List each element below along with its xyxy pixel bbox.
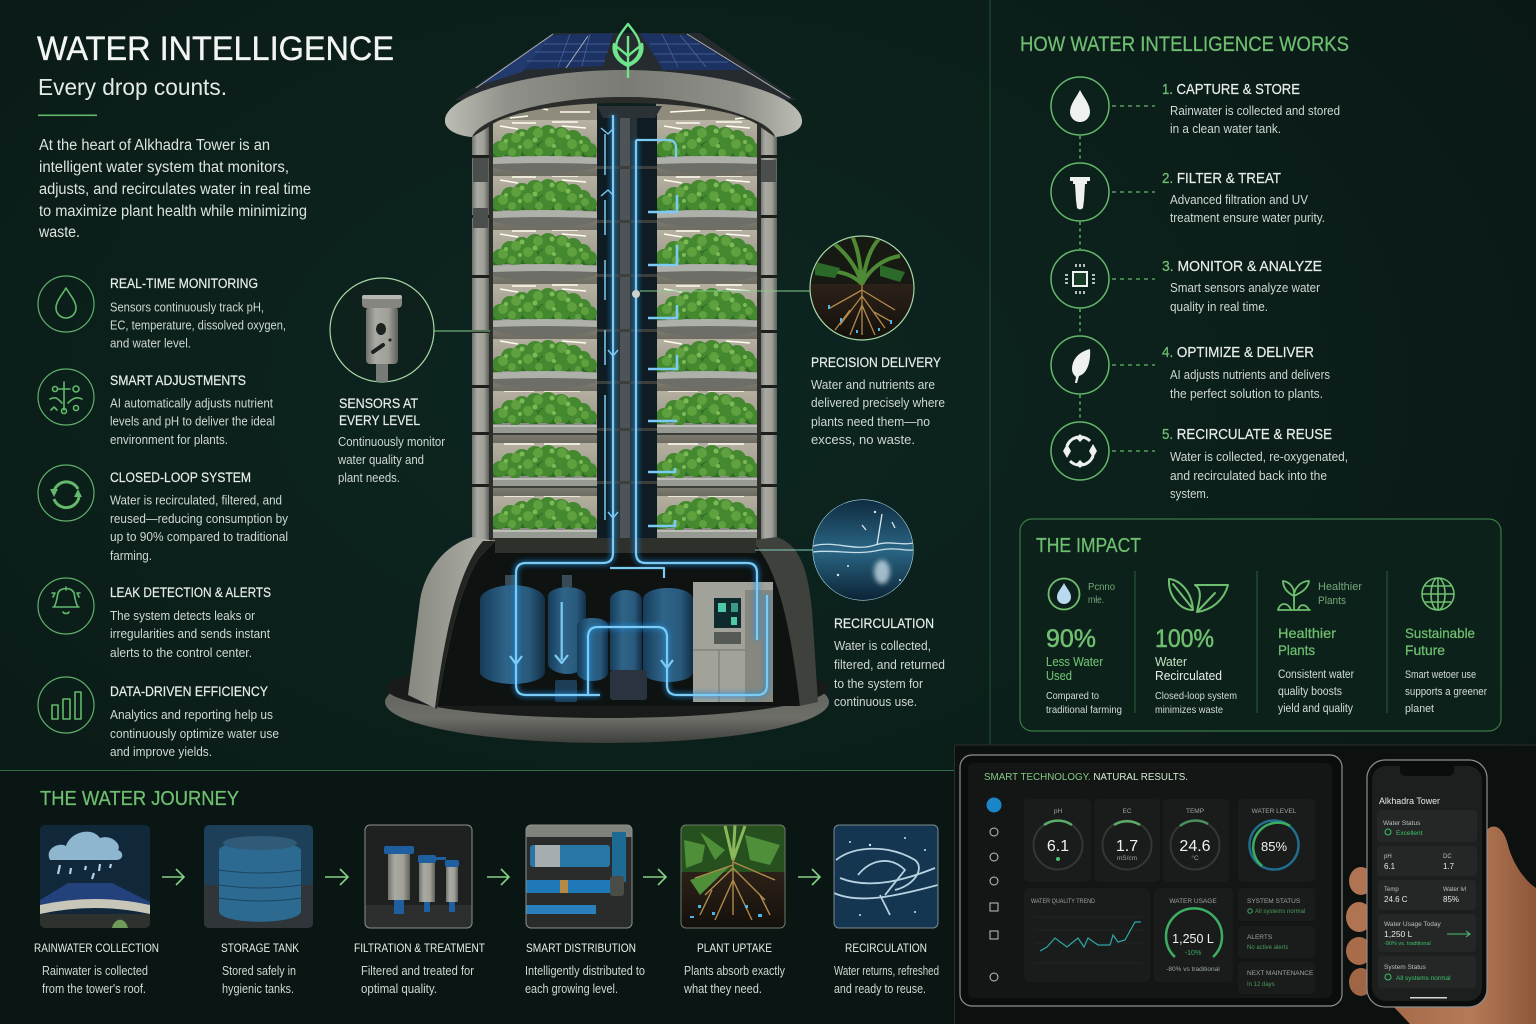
right growing bay <box>656 100 761 548</box>
step 2 filter and treat: 2. FILTER & TREAT <box>1162 171 1281 187</box>
journey 5 plant uptake: what they need. <box>683 982 762 996</box>
impact: healthier plants: Plants <box>1278 642 1315 658</box>
feature: real-time monitoring: REAL-TIME MONITORING <box>110 276 258 291</box>
impact: water recirculated: Recirculated <box>1155 669 1222 683</box>
callout: precision delivery: Water and nutrients are <box>811 378 935 392</box>
hand holding phone <box>1346 826 1536 1024</box>
intro paragraph <box>38 137 311 241</box>
journey 3 filtration and treatment: optimal quality. <box>361 982 437 996</box>
step 5 recirculate and reuse: Water is collected, re-oxygenated, <box>1170 450 1348 464</box>
step 3 monitor and analyze <box>1051 250 1322 314</box>
card alerts: ALERTS <box>1247 934 1273 941</box>
impact: healthier plants <box>1278 581 1362 715</box>
intro paragraph: At the heart of Alkhadra Tower is an <box>39 137 270 154</box>
water pipes <box>510 115 767 695</box>
step 5 recirculate and reuse: system. <box>1170 487 1209 501</box>
phone system status: All systems normal <box>1396 975 1451 982</box>
dashboard sidebar <box>986 798 1002 981</box>
step 4 optimize and deliver: 4. OPTIMIZE & DELIVER <box>1162 345 1314 361</box>
feature: real-time monitoring <box>38 276 286 350</box>
phone water usage: -90% vs. traditional <box>1384 941 1431 947</box>
step 1 capture and store: in a clean water tank. <box>1170 122 1281 136</box>
card water usage: WATER USAGE <box>1169 898 1217 905</box>
left growing bay <box>492 100 597 548</box>
step 5 recirculate and reuse: 5. RECIRCULATE & REUSE <box>1162 427 1332 443</box>
phone water status: Excellent <box>1396 830 1423 837</box>
journey 5 plant uptake: PLANT UPTAKE <box>697 943 772 955</box>
callout: sensors at every level: EVERY LEVEL <box>339 412 420 428</box>
impact: water recirculated: 100% <box>1155 625 1214 653</box>
step 1 capture and store <box>1051 77 1340 136</box>
card next maintenance: NEXT MAINTENANCE <box>1247 970 1314 977</box>
roof rim <box>445 70 802 137</box>
impact: healthier plants: Plants <box>1318 595 1346 607</box>
impact: water recirculated <box>1155 579 1237 716</box>
feature: leak detection: LEAK DETECTION & ALERTS <box>110 585 271 600</box>
feature: leak detection <box>38 578 271 660</box>
phone metrics: Water lvl <box>1443 887 1466 893</box>
feature: closed-loop system: farming. <box>110 549 152 563</box>
intro paragraph: waste. <box>38 224 80 241</box>
step 2 filter and treat: treatment ensure water purity. <box>1170 211 1325 225</box>
feature: data-driven efficiency: continuously optimize water use <box>110 727 279 741</box>
impact: less water: Less Water <box>1046 655 1103 669</box>
central core <box>597 106 662 540</box>
feature: closed-loop system: CLOSED-LOOP SYSTEM <box>110 470 251 485</box>
impact: water recirculated: Water <box>1155 655 1187 669</box>
step 3 monitor and analyze: Smart sensors analyze water <box>1170 281 1320 295</box>
impact: less water: Compared to <box>1046 690 1099 702</box>
impact: less water <box>1046 578 1122 716</box>
card water level: 85% <box>1261 839 1287 854</box>
journey 5 plant uptake: Plants absorb exactly <box>684 964 786 978</box>
phone metrics: Temp <box>1384 887 1399 893</box>
tower body <box>472 125 777 540</box>
callout: sensors at every level: SENSORS AT <box>339 395 418 411</box>
card pH: pH <box>1054 808 1062 815</box>
card alerts <box>1238 926 1315 958</box>
impact: healthier plants: quality boosts <box>1278 686 1342 698</box>
feature: real-time monitoring: EC, temperature, dissolved oxygen, <box>110 318 286 332</box>
impact: sustainable future: planet <box>1405 703 1434 715</box>
tower illustration <box>385 24 829 743</box>
step 4 optimize and deliver <box>1051 336 1330 401</box>
callout: sensors at every level <box>330 278 490 485</box>
feature: leak detection: The system detects leaks or <box>110 609 255 623</box>
callout: sensors at every level: water quality and <box>337 453 424 467</box>
phone metrics: 1.7 <box>1443 862 1455 871</box>
card TEMP: 24.6 <box>1179 838 1211 855</box>
card EC: mS/cm <box>1117 855 1137 862</box>
journey 3 filtration and treatment: FILTRATION & TREATMENT <box>354 943 485 955</box>
phone water status: Water Status <box>1383 820 1421 827</box>
panel: the impact <box>1020 519 1501 731</box>
water journey <box>34 825 939 996</box>
phone water usage: Water Usage Today <box>1384 921 1441 928</box>
card next maintenance: In 12 days <box>1247 982 1275 988</box>
card water usage: 1,250 L <box>1172 932 1214 946</box>
feature: data-driven efficiency: DATA-DRIVEN EFFICIENCY <box>110 684 268 699</box>
journey 4 smart distribution: Intelligently distributed to <box>525 964 645 978</box>
card water level: WATER LEVEL <box>1252 808 1297 815</box>
callout: sensors at every level: Continuously monitor <box>338 435 445 449</box>
feature: smart adjustments: levels and pH to deliver the ideal <box>110 414 275 428</box>
journey 1 rainwater collection <box>34 825 184 996</box>
callout: recirculation: to the system for <box>834 677 923 691</box>
process steps <box>1051 77 1348 501</box>
card water usage <box>1154 888 1233 982</box>
callout: precision delivery: PRECISION DELIVERY <box>811 355 941 370</box>
phone metrics: pH <box>1384 854 1392 860</box>
journey 2 storage tank: Stored safely in <box>222 964 296 978</box>
card pH: 6.1 <box>1047 838 1069 855</box>
journey 3 filtration and treatment: Filtered and treated for <box>361 964 474 978</box>
journey 2 storage tank: hygienic tanks. <box>222 982 294 996</box>
impact: less water: traditional farming <box>1046 704 1122 716</box>
step 1 capture and store: Rainwater is collected and stored <box>1170 104 1340 118</box>
callout: precision delivery: delivered precisely where <box>811 396 945 410</box>
journey 1 rainwater collection: from the tower's roof. <box>42 982 146 996</box>
feature: real-time monitoring: Sensors continuously track pH, <box>110 300 264 314</box>
journey 6 recirculation: RECIRCULATION <box>845 943 927 955</box>
journey 4 smart distribution: each growing level. <box>525 982 618 996</box>
feature: smart adjustments: AI automatically adjusts nutrient <box>110 396 273 410</box>
water tanks <box>480 575 693 702</box>
journey 6 recirculation: Water returns, refreshed <box>834 964 939 978</box>
callout: recirculation <box>755 500 945 709</box>
feature: leak detection: alerts to the control center. <box>110 646 252 660</box>
feature: smart adjustments: SMART ADJUSTMENTS <box>110 373 246 388</box>
feature: data-driven efficiency: Analytics and reporting help us <box>110 708 273 722</box>
feature: leak detection: irregularities and sends instant <box>110 627 270 641</box>
phone water usage <box>1378 914 1476 952</box>
step 5 recirculate and reuse <box>1051 422 1348 501</box>
impact heading: THE IMPACT <box>1036 535 1141 557</box>
impact: healthier plants: Healthier <box>1318 581 1362 593</box>
step 2 filter and treat: Advanced filtration and UV <box>1170 193 1309 207</box>
card alerts: No active alerts <box>1247 945 1288 951</box>
feature: smart adjustments <box>38 369 275 447</box>
impact: healthier plants: yield and quality <box>1278 703 1353 715</box>
callout: recirculation: continuous use. <box>834 695 917 709</box>
card TEMP: TEMP <box>1186 808 1204 815</box>
impact: less water: Used <box>1046 669 1072 683</box>
impact: less water: rnłe. <box>1088 595 1104 606</box>
step 3 monitor and analyze: quality in real time. <box>1170 300 1268 314</box>
impact: healthier plants: Healthier <box>1278 625 1336 641</box>
impact: less water: Pcnno <box>1088 582 1115 593</box>
phone water status <box>1377 810 1477 842</box>
phone metrics: 85% <box>1443 895 1459 904</box>
intro paragraph: intelligent water system that monitors, <box>39 159 289 176</box>
callout: precision delivery: plants need them—no <box>811 415 930 429</box>
callout: precision delivery: excess, no waste. <box>811 433 915 447</box>
card TEMP <box>1163 799 1229 882</box>
dashboard title: SMART TECHNOLOGY. NATURAL RESULTS. <box>984 771 1188 783</box>
subtitle: Every drop counts. <box>38 74 227 100</box>
impact: water recirculated: Closed-loop system <box>1155 690 1237 702</box>
bottom strip background <box>0 771 955 1024</box>
leaf logo <box>614 24 642 120</box>
feature: closed-loop system: up to 90% compared to traditional <box>110 530 288 544</box>
card system status <box>1238 888 1315 921</box>
impact: sustainable future: Sustainable <box>1405 625 1475 641</box>
heading: the water journey: THE WATER JOURNEY <box>40 787 239 810</box>
base shell <box>408 537 818 709</box>
card water usage: -80% vs traditional <box>1166 966 1220 973</box>
phone metrics: 24.6 C <box>1384 895 1408 904</box>
card water quality trend: WATER QUALITY TREND <box>1031 898 1095 905</box>
phone system status <box>1378 956 1476 988</box>
feature list <box>38 276 289 759</box>
phone metrics: DC <box>1443 854 1452 860</box>
journey 6 recirculation <box>834 825 939 996</box>
tower base plate <box>385 658 829 743</box>
card EC <box>1094 799 1160 882</box>
impact: healthier plants: Consistent water <box>1278 669 1354 681</box>
card water usage: -10% <box>1185 950 1201 957</box>
step 1 capture and store: 1. CAPTURE & STORE <box>1162 82 1300 98</box>
callout: precision delivery <box>640 236 945 447</box>
feature: closed-loop system <box>38 465 289 563</box>
dashboard background <box>955 745 1536 1024</box>
phone metrics: 6.1 <box>1384 862 1396 871</box>
heading: how water intelligence works: HOW WATER INTELLIGENCE WORKS <box>1020 33 1349 56</box>
roof with solar panels <box>455 33 796 100</box>
card pH <box>1024 799 1091 882</box>
journey 4 smart distribution <box>525 825 666 996</box>
intro paragraph: adjusts, and recirculates water in real time <box>39 181 311 198</box>
phone water usage: 1,250 L <box>1384 929 1413 939</box>
impact: sustainable future <box>1405 578 1487 715</box>
step 5 recirculate and reuse: and recirculated back into the <box>1170 469 1327 483</box>
phone system status: System Status <box>1384 964 1427 971</box>
journey 3 filtration and treatment <box>354 825 509 996</box>
impact: sustainable future: supports a greener <box>1405 686 1487 698</box>
impact: sustainable future: Smart wetoer use <box>1405 669 1476 681</box>
journey 4 smart distribution: SMART DISTRIBUTION <box>526 943 636 955</box>
journey 1 rainwater collection: Rainwater is collected <box>42 964 148 978</box>
feature: smart adjustments: environment for plants. <box>110 433 228 447</box>
step 3 monitor and analyze: 3. MONITOR & ANALYZE <box>1162 259 1322 275</box>
callout: sensors at every level: plant needs. <box>338 471 400 485</box>
callout: recirculation: Water is collected, <box>834 639 931 653</box>
intro paragraph: to maximize plant health while minimizing <box>39 203 307 220</box>
feature: closed-loop system: reused—reducing consumption by <box>110 512 289 526</box>
phone metrics <box>1377 846 1477 910</box>
journey 6 recirculation: and ready to reuse. <box>834 982 926 996</box>
feature: data-driven efficiency: and improve yields. <box>110 745 212 759</box>
journey 2 storage tank: STORAGE TANK <box>221 943 299 955</box>
callout: recirculation: filtered, and returned <box>834 658 945 672</box>
card water level <box>1238 799 1315 882</box>
step 4 optimize and deliver: AI adjusts nutrients and delivers <box>1170 368 1330 382</box>
title: WATER INTELLIGENCE <box>37 30 394 68</box>
feature: closed-loop system: Water is recirculated, filtered, and <box>110 494 282 508</box>
card next maintenance <box>1238 962 1315 994</box>
journey 5 plant uptake <box>681 825 820 996</box>
card system status: SYSTEM STATUS <box>1247 898 1301 905</box>
step 2 filter and treat <box>1051 163 1325 225</box>
card TEMP: °C <box>1191 854 1199 862</box>
card EC: EC <box>1122 808 1132 815</box>
journey 2 storage tank <box>204 825 348 996</box>
callout: recirculation: RECIRCULATION <box>834 616 934 631</box>
feature: real-time monitoring: and water level. <box>110 336 191 350</box>
impact: less water: 90% <box>1046 625 1096 653</box>
tablet dashboard <box>960 755 1342 1006</box>
phone <box>1367 760 1487 1007</box>
card water quality trend <box>1024 888 1150 982</box>
journey 1 rainwater collection: RAINWATER COLLECTION <box>34 943 159 955</box>
control cabinet <box>693 582 773 702</box>
impact: water recirculated: minimizes waste <box>1155 704 1223 716</box>
feature: data-driven efficiency <box>38 677 279 759</box>
card system status: All systems normal <box>1255 909 1305 915</box>
step 4 optimize and deliver: the perfect solution to plants. <box>1170 387 1323 401</box>
card EC: 1.7 <box>1116 838 1138 855</box>
phone header: Alkhadra Tower <box>1379 796 1440 806</box>
impact: sustainable future: Future <box>1405 642 1445 658</box>
